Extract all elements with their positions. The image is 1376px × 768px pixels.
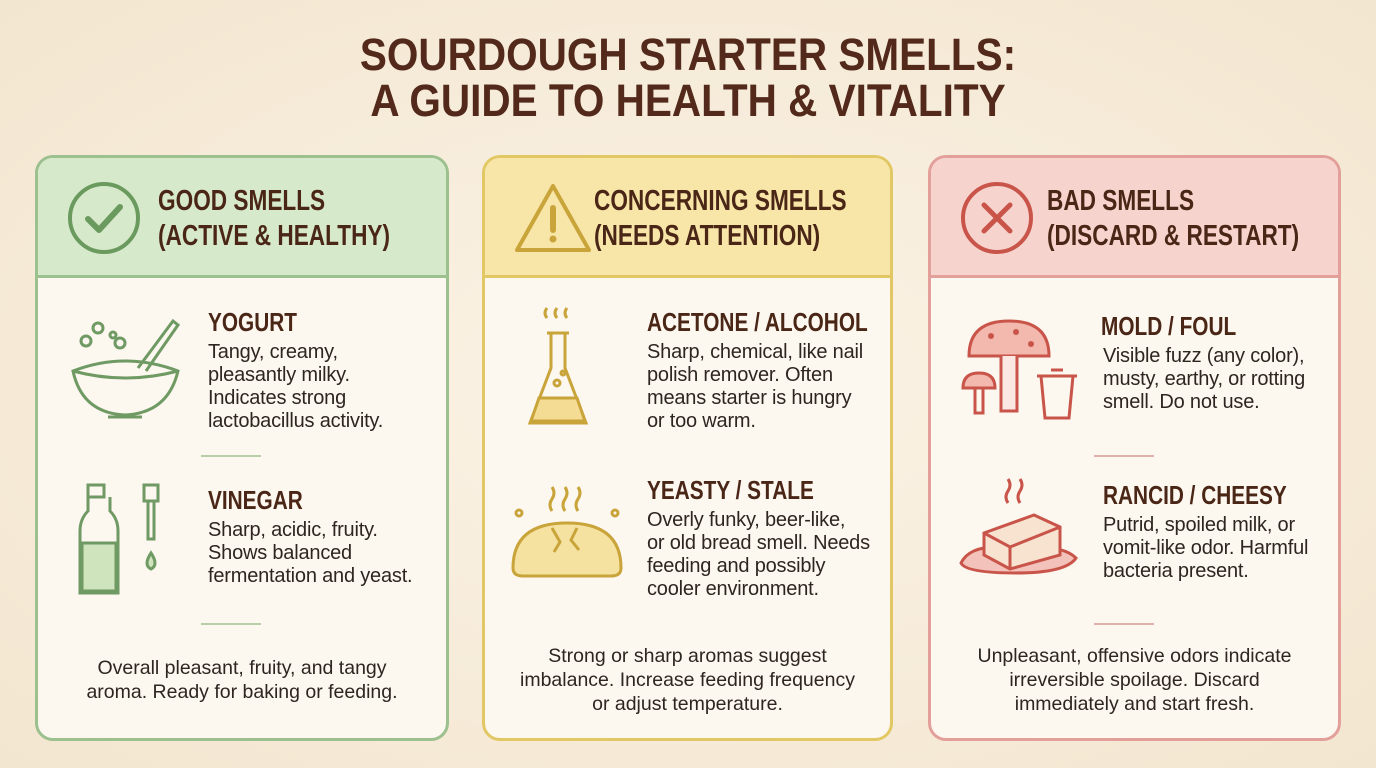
text: vinegar: [208, 519, 412, 587]
panel: concerning smells: [482, 155, 893, 741]
icon: x: [961, 182, 1033, 254]
heading: bad: [1047, 185, 1299, 252]
footer text: concerning: Strong or sharp aromas suggest: [548, 645, 827, 667]
text: yeasty: feeding and possibly: [647, 555, 825, 577]
text: mold: smell. Do not use.: [1103, 391, 1259, 413]
icon: warning: [515, 184, 592, 252]
text: yogurt: lactobacillus activity.: [208, 410, 383, 432]
heading: concerning: CONCERNING SMELLS: [594, 185, 847, 217]
heading: bad: (DISCARD & RESTART): [1047, 220, 1299, 252]
text: mold: [1103, 345, 1305, 413]
heading: vinegar: VINEGAR: [208, 485, 303, 515]
footer text: bad: [977, 645, 1292, 715]
panel: bad smells: [928, 155, 1341, 741]
text: rancid: vomit-like odor. Harmful: [1103, 537, 1308, 559]
footer text: concerning: [520, 645, 855, 715]
panel: good smells: [35, 155, 449, 741]
footer text: concerning: or adjust temperature.: [592, 693, 783, 715]
text: acetone: or too warm.: [647, 410, 756, 432]
text: yogurt: pleasantly milky.: [208, 364, 350, 386]
footer text: bad: irreversible spoilage. Discard: [1009, 669, 1260, 691]
footer text: bad: immediately and start fresh.: [1015, 693, 1254, 715]
text: mold: Visible fuzz (any color),: [1103, 345, 1304, 367]
text: acetone: polish remover. Often: [647, 364, 833, 386]
icon: butter: [959, 478, 1078, 574]
header: concerning: [485, 158, 890, 278]
heading: yogurt: YOGURT: [208, 307, 297, 337]
footer text: concerning: imbalance. Increase feeding frequency: [520, 669, 855, 691]
heading: mold: MOLD / FOUL: [1101, 311, 1236, 341]
text: acetone: [647, 341, 863, 432]
heading: rancid: RANCID / CHEESY: [1103, 480, 1287, 510]
item: yeasty: [512, 475, 870, 600]
icon: vinegar bottle: [78, 484, 160, 594]
footer text: good: aroma. Ready for baking or feeding.: [86, 681, 398, 703]
text: vinegar: Shows balanced: [208, 542, 352, 564]
text: yogurt: Tangy, creamy,: [208, 341, 338, 363]
text: rancid: Putrid, spoiled milk, or: [1103, 514, 1295, 536]
item: rancid: [959, 478, 1308, 582]
header: bad: [931, 158, 1338, 278]
heading: good: (ACTIVE & HEALTHY): [158, 220, 390, 252]
item: mold: [962, 311, 1305, 420]
icon: bowl: [71, 318, 180, 418]
title: SOURDOUGH STARTER SMELLS:: [360, 29, 1016, 80]
icon: check: [68, 182, 140, 254]
item: vinegar: [78, 484, 412, 594]
text: rancid: bacteria present.: [1103, 560, 1249, 582]
heading: yeasty: YEASTY / STALE: [647, 475, 814, 505]
text: yogurt: [208, 341, 383, 432]
text: yeasty: Overly funky, beer-like,: [647, 509, 845, 531]
footer text: good: [86, 657, 398, 703]
heading: good: GOOD SMELLS: [158, 185, 325, 217]
text: acetone: means starter is hungry: [647, 387, 851, 409]
text: mold: musty, earthy, or rotting: [1103, 368, 1305, 390]
heading: concerning: (NEEDS ATTENTION): [594, 220, 820, 252]
text: yogurt: Indicates strong: [208, 387, 346, 409]
title: A GUIDE TO HEALTH & VITALITY: [370, 75, 1006, 126]
item: yogurt: [71, 307, 383, 432]
heading: concerning: [594, 185, 847, 252]
text: vinegar: Sharp, acidic, fruity.: [208, 519, 378, 541]
heading: acetone: ACETONE / ALCOHOL: [647, 307, 868, 337]
text: vinegar: fermentation and yeast.: [208, 565, 412, 587]
text: yeasty: cooler environment.: [647, 578, 819, 600]
footer text: bad: Unpleasant, offensive odors indicate: [977, 645, 1292, 667]
text: yeasty: [647, 509, 870, 600]
title: [360, 29, 1016, 126]
icon: bread: [512, 486, 622, 578]
item: acetone: [528, 307, 868, 432]
icon: flask: [528, 307, 588, 424]
text: rancid: [1103, 514, 1308, 582]
header: good: [38, 158, 446, 278]
footer text: good: Overall pleasant, fruity, and tangy: [97, 657, 387, 679]
text: acetone: Sharp, chemical, like nail: [647, 341, 863, 363]
heading: good: [158, 185, 390, 252]
heading: bad: BAD SMELLS: [1047, 185, 1194, 217]
icon: mushroom and bin: [962, 320, 1077, 420]
text: yeasty: or old bread smell. Needs: [647, 532, 870, 554]
